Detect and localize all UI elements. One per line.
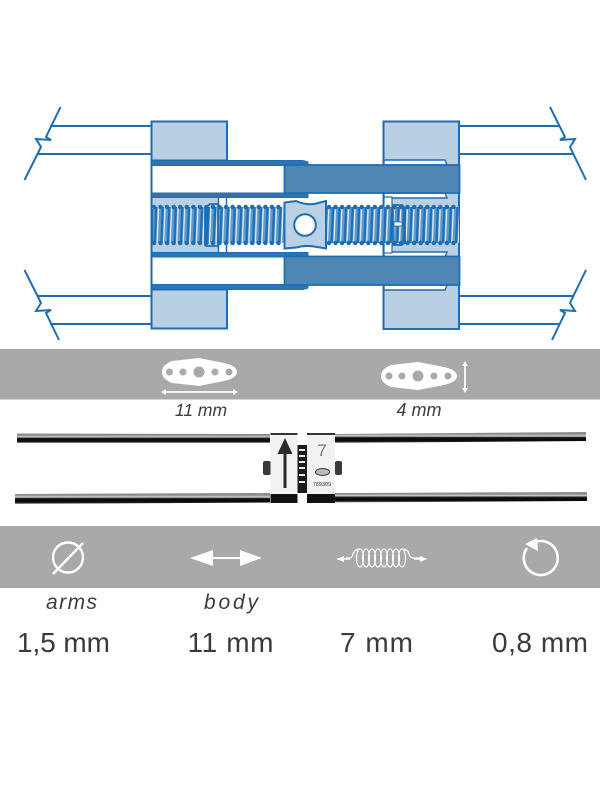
value: expansion: 7 mm <box>340 627 413 658</box>
left tube <box>151 121 308 329</box>
right nut collar <box>393 205 405 245</box>
upper left wire <box>17 434 270 443</box>
right body <box>307 433 335 503</box>
value: turn: 0,8 mm <box>492 627 588 658</box>
icon: spring <box>337 549 427 567</box>
label: arms: arms <box>46 591 98 614</box>
label: 11 mm width: 11 mm <box>175 400 227 420</box>
number 7: 7 <box>317 441 327 460</box>
icon: double arrow <box>190 550 262 566</box>
lower left wire <box>15 493 270 504</box>
left upper wire <box>24 107 151 180</box>
grey band: specification icons <box>0 526 600 588</box>
left nut collar <box>205 204 218 246</box>
logo oval <box>316 468 330 476</box>
right upper wire <box>459 107 586 180</box>
label: 4 mm height: 4 mm <box>396 400 442 420</box>
right block <box>384 122 459 329</box>
icon: plate width <box>161 358 238 395</box>
central screw body <box>284 201 326 248</box>
label: body: body <box>204 591 260 614</box>
central stripes <box>297 445 307 493</box>
dark sliding bars <box>284 165 460 285</box>
value: arm diameter: 1,5 mm <box>17 627 110 658</box>
product photo: expansion screw <box>15 432 587 504</box>
technical diagram: expansion screw cross-section <box>24 107 586 340</box>
value: body width: 11 mm <box>188 627 274 658</box>
grey band: arm plates <box>0 349 600 400</box>
upper right wire <box>335 432 586 443</box>
left lower block <box>152 290 227 328</box>
icon: black arrow <box>278 438 292 488</box>
side knobs <box>263 461 342 475</box>
icon: diameter <box>53 542 83 574</box>
left upper block <box>152 122 227 160</box>
right lower wire <box>459 270 586 340</box>
lower right wire <box>335 492 587 502</box>
icon: plate height <box>381 361 468 393</box>
part code: 789309 <box>313 482 331 488</box>
threaded screw <box>152 207 459 243</box>
left lower wire <box>24 270 151 340</box>
left body <box>270 433 298 503</box>
icon: rotation arrow <box>524 538 558 575</box>
